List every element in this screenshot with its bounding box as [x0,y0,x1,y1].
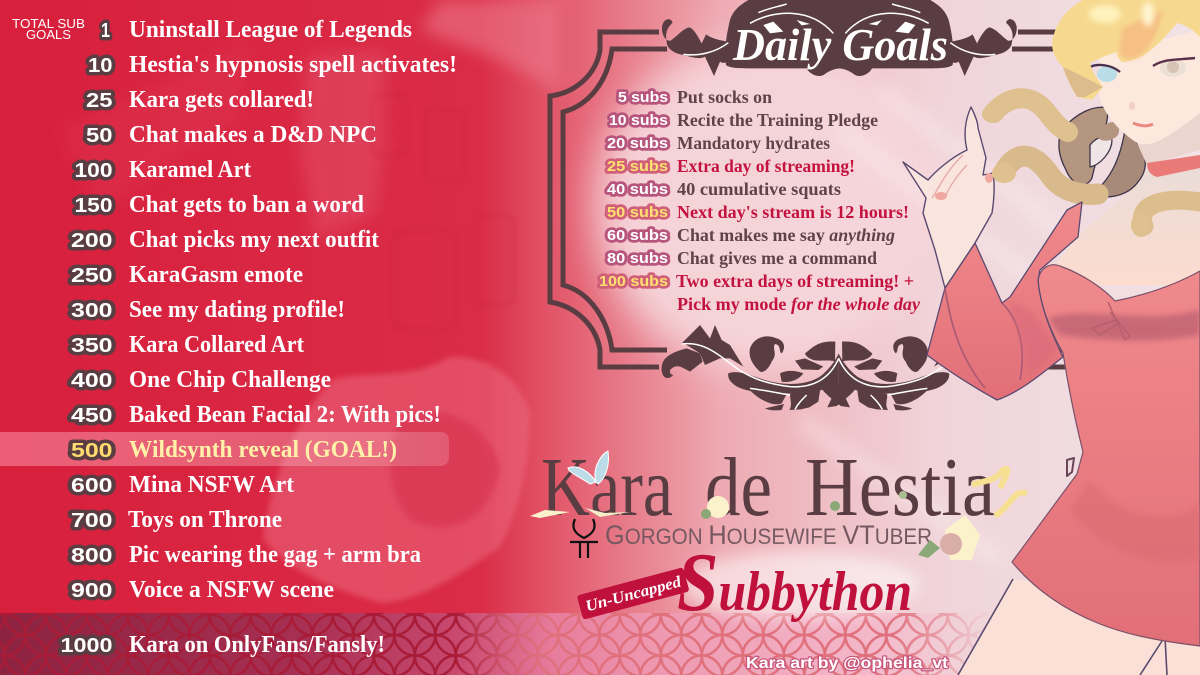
icon: butterfly [568,451,609,484]
daily goal 10 subs: Recite the Training Pledge [677,110,878,130]
word: Subbython: Subbython [677,536,912,629]
goal 400: 400 [71,370,112,392]
goal 900: 900 [71,580,112,602]
daily goal 50 subs: Next day's stream is 12 hours! [677,202,909,222]
daily goal 25 subs: 25 subs [607,158,668,175]
label: total sub goals: TOTAL SUB [12,17,85,31]
goal 25: Kara gets collared! [129,87,314,113]
ornament: bottom flourish [662,325,1016,410]
goal 600: Mina NSFW Art [129,472,294,498]
leg [958,579,1200,675]
daily goal 100 subs [599,271,921,314]
goal 10: 10 [88,55,112,77]
goal 50: Chat makes a D&D NPC [129,122,377,148]
daily goal 25 subs: Extra day of streaming! [677,156,855,176]
logo name [541,441,995,534]
goal 1000: Kara on OnlyFans/Fansly! [129,632,385,658]
patterned bottom band [0,613,990,675]
goal 25: 25 [86,90,112,112]
daily goal 80 subs: Chat gives me a command [677,248,877,268]
daily goal 20 subs [607,133,830,153]
credit: Kara art by @ophelia_vt [746,655,949,672]
dress bow [1092,302,1130,340]
photo: rose [263,357,530,603]
daily goal 5 subs: 5 subs [618,89,668,106]
goal 350: Kara Collared Art [129,332,304,358]
goal 450: 450 [71,405,112,427]
goal 10: Hestia's hypnosis spell activates! [129,52,457,78]
goal 250: KaraGasm emote [129,262,303,288]
goal 900: Voice a NSFW scene [129,577,334,603]
daily goal 5 subs [618,87,772,107]
daily goal 60 subs: 60 subs [607,227,668,244]
title: Un-Uncapped Subbython [577,536,920,629]
logo name: Hestia [805,441,995,534]
goal 800: Pic wearing the gag + arm bra [129,542,421,568]
goal 500 highlighted: 500 [71,440,112,462]
goal 200: Chat picks my next outfit [129,227,379,253]
goal 100: Karamel Art [129,157,251,183]
daily goals list [599,87,921,314]
daily goal 40 subs: 40 cumulative squats [677,179,841,199]
dress torso [1012,265,1200,646]
daily goal 100 subs: Two extra days of streaming! + [676,271,914,291]
daily goal 40 subs: 40 subs [607,181,668,198]
daily goal 60 subs: Chat makes me say anything [677,225,895,245]
goal 1: 1 [101,20,110,42]
logo: Kara de Hestia [530,441,1027,560]
label: total sub goals: GOALS [26,28,71,42]
tag: Un-Uncapped: Un-Uncapped [584,573,684,615]
snake heads [982,105,1151,237]
goal 350: 350 [71,335,112,357]
logo name: Kara [541,441,673,534]
goal 700: Toys on Throne [128,507,282,533]
goal 200: 200 [71,230,112,252]
goal 150: Chat gets to ban a word [129,192,365,218]
neck and chest [1040,155,1200,285]
goal 300: See my dating profile! [129,297,345,323]
panel frame: daily goals [550,32,1066,367]
logo name: de [705,441,772,534]
goal 100: 100 [74,160,112,182]
ornament: top flourish [662,0,1017,76]
tag: Un-Uncapped [577,567,689,620]
daily goal 20 subs: Mandatory hydrates [677,133,830,153]
character illustration: Kara [903,0,1200,675]
total sub goals list [60,17,457,658]
daily goal 50 subs: 50 subs [607,204,668,221]
highlight bar for 500 goal [0,432,449,466]
goal 500 highlighted: Wildsynth reveal (GOAL!) [129,437,397,463]
goal 150: 150 [74,195,112,217]
goal 450: Baked Bean Facial 2: With pics! [129,402,441,428]
goal 800: 800 [71,545,112,567]
goal 600: 600 [71,475,112,497]
hand [903,107,994,288]
icon: gorgon trident [570,519,598,558]
icon: yellow snake [972,469,1027,516]
neck [1137,105,1200,165]
goal 300: 300 [71,300,112,322]
goal 1000: 1000 [60,635,112,657]
goal 400: One Chip Challenge [129,367,331,393]
goal 250: 250 [71,265,112,287]
eyes and lips [1090,58,1195,126]
heading: daily goals: Daily Goals [732,19,948,70]
label: total sub goals [12,17,85,42]
daily goal 40 subs [607,179,841,199]
goal 700: 700 [71,510,112,532]
daily goal 100 subs: 100 subs [599,273,668,290]
hair [1052,0,1200,100]
choker [1147,155,1200,177]
sleeve [927,202,1082,400]
goal 50: 50 [86,125,112,147]
daily goal 80 subs: 80 subs [607,250,668,267]
logo tagline: GORGON HOUSEWIFE VTUBER [605,520,932,550]
daily goal 10 subs: 10 subs [609,112,668,129]
white glow [680,551,920,619]
daily goal 5 subs: Put socks on [677,87,772,107]
goal 100 [74,157,251,183]
snakes and hair loops [994,98,1200,226]
face [1098,30,1200,144]
daily goal 20 subs: 20 subs [607,135,668,152]
daily goal 100 subs: Pick my mode for the whole day [677,294,921,314]
icon: flowers [530,491,980,560]
goal 1: Uninstall League of Legends [129,17,412,43]
